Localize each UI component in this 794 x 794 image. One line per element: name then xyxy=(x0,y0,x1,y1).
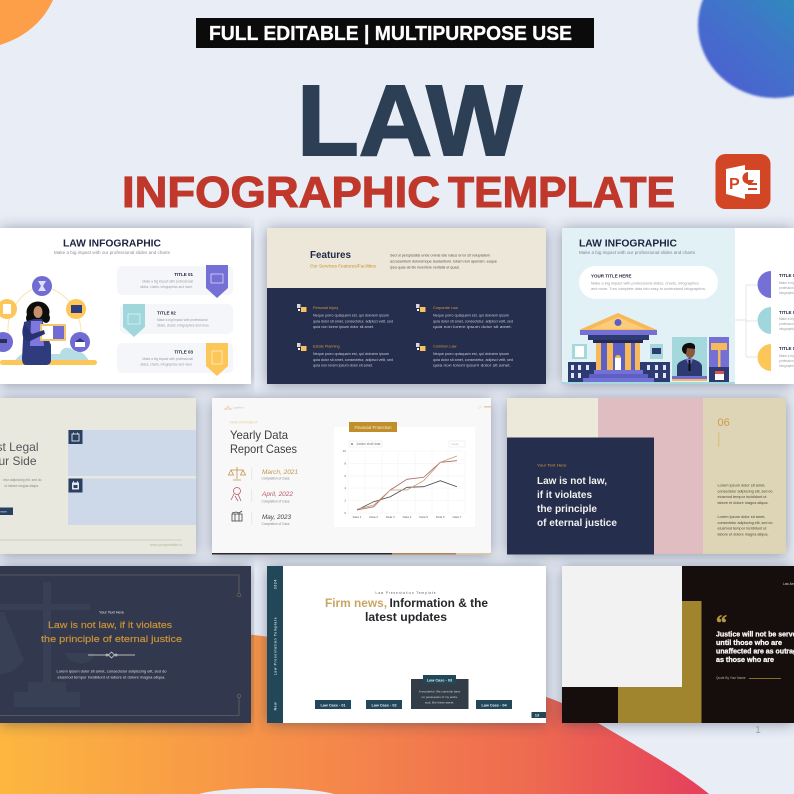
illustration: courthouse xyxy=(568,313,670,382)
callout: your title here: Make a big impact with professional slides, charts, infographics xyxy=(591,282,699,286)
heading: features: Features xyxy=(310,249,351,261)
item: corporate law: quia dolor sit amet, consectetur, adipisci velit, sed xyxy=(433,320,513,324)
title: LAW: LAW xyxy=(297,65,523,177)
text: legal paragraph: etur adipiscing elit, sed do xyxy=(3,478,42,482)
item: May 2023: May, 2023 xyxy=(262,514,291,521)
text: justice quote xyxy=(716,632,794,664)
text: justice quote: as those who are xyxy=(716,657,774,664)
line chart: justice case data: 6 xyxy=(344,474,346,478)
line chart: justice case data: Data 5 xyxy=(419,515,428,519)
number: 06: 06 xyxy=(718,417,730,429)
card: title 02: Make a big impact with professional xyxy=(157,318,208,322)
text: slide 6 paragraph: labore et dolore magna aliqua. xyxy=(718,532,769,536)
panel: slide 2 features xyxy=(267,228,546,384)
line chart: justice case data: 0 xyxy=(344,511,346,515)
icon: purple half circle xyxy=(758,271,771,298)
illustration: lawyer portrait xyxy=(672,337,707,381)
text: your text here: Your Text Here xyxy=(99,610,124,614)
item: common law: quia non lorem ipsum dolor sit amet. xyxy=(433,364,511,368)
icon: quote mark: “ xyxy=(716,610,727,635)
divider and url: www.yourgreatsite.in xyxy=(150,543,182,547)
card: title 02: TITLE 02 xyxy=(157,310,176,316)
item: corporate law xyxy=(416,304,513,329)
image placeholder: white square xyxy=(562,566,682,687)
item: corporate law: Corporate Law xyxy=(433,306,458,310)
frame: gold corner border xyxy=(0,575,241,716)
line chart: justice case data: Data 2 xyxy=(369,515,378,519)
illustration: woman with tablet and icons xyxy=(0,276,97,365)
item: March 2021: March, 2021 xyxy=(262,469,298,476)
card: title 02: slides, charts, infographics and more. xyxy=(157,324,210,328)
text: slide 6 paragraph xyxy=(718,484,773,536)
item: corporate law: Neque porro quisquam est, qui dolorem ipsum xyxy=(433,314,509,318)
text: slide 7 paragraph: eiusmod tempor incididunt ut labore et dolore magna aliqua. xyxy=(58,676,166,680)
card: title 01: TITLE 01 xyxy=(174,272,193,277)
text: slide 6 paragraph: eiusmod tempor incididunt ut xyxy=(718,526,767,530)
text: slide 6 paragraph: eiusmod tempor incididunt ut xyxy=(718,495,767,499)
subtitle: infographic template: INFOGRAPHIC xyxy=(122,168,440,217)
text: gold quote: Law is not law, if it violates xyxy=(48,620,172,631)
card: law case 03: soul, like these sweet. xyxy=(425,700,454,704)
item: common law: quia dolor sit amet, consectetur, adipisci velit, sed xyxy=(433,358,513,362)
text: right titles xyxy=(779,273,794,368)
text: features subheading: Our Services Features/Facilities xyxy=(310,264,377,268)
page number tag: 13 xyxy=(535,712,540,718)
item: April 2022 xyxy=(231,488,293,504)
item: personal injury: Neque porro quisquam est, qui dolorem ipsum xyxy=(313,314,389,318)
text: slide 7 paragraph xyxy=(56,670,167,680)
line chart: justice case data: Data 1 xyxy=(353,515,362,519)
background: bottom gradient wave xyxy=(0,620,709,794)
item: common law: Neque porro quisquam est, qui dolorem ipsum xyxy=(433,352,509,356)
item: April 2022: April, 2022 xyxy=(261,491,293,498)
item: estate planning: quia non lorem ipsum dolor sit amet. xyxy=(313,364,373,368)
card: title 02 xyxy=(120,304,233,337)
tag: law case 01: Law Case - 01 xyxy=(320,703,346,707)
line chart: justice case data: Data 6 xyxy=(436,515,445,519)
line chart: justice case data: Data 3 xyxy=(386,515,395,519)
heading: legal side xyxy=(0,440,38,468)
block: navy quote: if it violates xyxy=(537,489,592,501)
watermark: scales of justice xyxy=(0,582,95,707)
heading: firm news: latest updates xyxy=(365,612,447,624)
tag: financial protection xyxy=(349,422,397,432)
tag: law case 04: Law Case - 04 xyxy=(481,703,507,707)
line chart: justice case data: Data 4 xyxy=(403,515,412,519)
card: law case 03: Law Case - 03 xyxy=(427,678,452,682)
icon: calendar top xyxy=(68,430,82,444)
item: April 2022: Completion of Case xyxy=(262,500,290,504)
line chart: justice case data: 2 xyxy=(344,498,346,502)
card: law case 03 xyxy=(411,675,468,709)
item: estate planning xyxy=(297,343,393,368)
heading: yearly data report cases xyxy=(230,428,297,456)
icon: yellow half circle xyxy=(758,344,771,371)
logo xyxy=(224,406,244,410)
page marker xyxy=(478,406,491,410)
card: law case 03: no possession of my entire xyxy=(422,695,458,699)
accent bar xyxy=(718,432,719,447)
item: personal injury: Personal Injury xyxy=(313,306,338,310)
line chart: justice case data: Yearly xyxy=(451,442,459,446)
icon: PowerPoint logo: P xyxy=(729,176,740,193)
page number: 1 xyxy=(755,725,761,736)
callout: your title here: and more. Turn complete data into easy to understand infographics. xyxy=(591,287,706,291)
sidebar: vertical label xyxy=(267,566,283,723)
text: attribution xyxy=(716,676,781,680)
ornament divider xyxy=(88,652,135,658)
text: features paragraph: Sed ut perspiciatis unde omnis iste natus error sit voluptatem xyxy=(390,254,490,258)
text: features paragraph: ipsa quae ab illo inventore veritatis et quasi. xyxy=(390,266,460,270)
item: May 2023: Completion of Case xyxy=(262,522,290,526)
diagram: connector lines xyxy=(735,285,757,357)
card: title 01: slides, charts, infographics and more. xyxy=(140,285,193,289)
heading: firm news: Firm news, xyxy=(325,598,387,610)
line chart: justice case data: Justice shall data xyxy=(356,442,381,446)
text: features paragraph xyxy=(390,254,497,270)
banner: full editable: FULL EDITABLE | MULTIPURPOSE USE xyxy=(209,23,572,45)
panel: slide 9 justice quote xyxy=(562,566,794,723)
heading: firm news: Information & the xyxy=(390,598,488,610)
text: gold quote xyxy=(41,620,182,645)
callout: your title here: YOUR TITLE HERE xyxy=(591,274,632,278)
item: corporate law: quia non lorem ipsum dolor sit amet. xyxy=(433,325,512,329)
block: navy quote xyxy=(507,438,654,554)
card: title 01: Make a big impact with professional xyxy=(142,280,193,284)
panel: slide 7 dark quote xyxy=(0,566,251,723)
heading: firm news xyxy=(325,598,488,624)
icon: teal half circle xyxy=(758,307,771,334)
line chart: justice case data xyxy=(334,427,475,527)
block: navy quote: of eternal justice xyxy=(537,517,617,529)
item: common law xyxy=(416,343,513,368)
item: March 2021: Completion of Case xyxy=(262,476,290,480)
card: law case 03: A wonderful. We currently have xyxy=(419,690,461,694)
text: attribution: Quote By Your Name xyxy=(716,676,746,680)
text: slide 6 paragraph: consectetur adipiscing elit, sed do xyxy=(718,490,773,494)
text: eyebrow: Law Presentation Template xyxy=(376,591,436,595)
subtitle: infographic template xyxy=(122,168,675,217)
text: slide 6 paragraph: labore et dolore magna aliqua. xyxy=(718,501,769,505)
text: slide 3 subtitle: Make a big impact with our professional slides and charts xyxy=(579,250,696,255)
line chart: justice case data: Data 7 xyxy=(453,515,462,519)
sidebar: vertical label: New xyxy=(274,702,278,710)
card: title 03: TITLE 03 xyxy=(174,350,193,354)
text: justice quote: until those who are xyxy=(716,640,782,647)
block: navy quote: the principle xyxy=(537,503,597,515)
panel: slide 3 courthouse infographic xyxy=(562,228,794,384)
panel: slide 5 yearly data xyxy=(212,398,491,554)
item: common law: Common Law xyxy=(433,344,457,348)
card: title 03: Make a big impact with professional xyxy=(142,357,193,361)
icon: PowerPoint logo xyxy=(716,154,770,209)
line chart: justice case data: 4 xyxy=(344,486,346,490)
text: slide 6 paragraph: consectetur adipiscing elit, sed do xyxy=(718,521,773,525)
button: read more xyxy=(0,508,13,515)
sidebar: vertical label: Law Presentation Template xyxy=(274,617,278,675)
text: legal paragraph xyxy=(3,478,42,488)
line chart: justice case data: 8 xyxy=(344,462,346,466)
block: navy quote: Law is not law, xyxy=(537,475,607,487)
tag: law case 02: Law Case - 02 xyxy=(371,703,397,707)
line chart: justice case data: 10 xyxy=(343,449,346,453)
button: read more: more xyxy=(0,510,7,514)
block: gold rectangle xyxy=(618,601,702,723)
panel: slide 8 firm news xyxy=(267,566,546,723)
text: legal paragraph: ut labore magna aliqua. xyxy=(5,484,39,488)
panel: slide 1 law infographic xyxy=(0,228,251,384)
item: personal injury: quia dolor sit amet, consectetur, adipisci velit, sed xyxy=(313,320,393,324)
text: slide 6 paragraph: Lorem ipsum dolor sit amet, xyxy=(718,484,766,488)
heading: law infographic: LAW INFOGRAPHIC xyxy=(63,238,161,250)
item: May 2023 xyxy=(232,511,291,526)
tag: financial protection: Financial Protection xyxy=(354,425,392,430)
heading: yearly data report cases: Yearly Data xyxy=(230,428,288,442)
text: gold quote: the principle of eternal justice xyxy=(41,634,182,645)
panel: slide 6 law quote xyxy=(507,398,786,554)
sidebar: vertical label: 2024 xyxy=(274,579,278,589)
subtitle: infographic template: TEMPLATE xyxy=(448,168,675,217)
block: navy quote: Your Text Here xyxy=(537,464,566,468)
item: March 2021 xyxy=(228,467,298,480)
tag: law case 01 xyxy=(315,700,351,709)
image placeholder: top xyxy=(68,430,196,476)
text: slide 1 subtitle: Make a big impact with our professional slides and charts xyxy=(54,250,171,255)
background: top-right blue blob xyxy=(698,0,794,98)
text: slide 7 paragraph: Lorem ipsum dolor sit amet, consectetur adipiscing elit, sed do xyxy=(56,670,167,674)
heading: law infographic: LAW INFOGRAPHIC xyxy=(579,238,677,250)
item: estate planning: Estate Planning xyxy=(313,344,340,348)
callout: your title here xyxy=(579,266,718,299)
background: top-left orange blob xyxy=(0,0,53,45)
item: estate planning: quia dolor sit amet, consectetur, adipisci velit, sed xyxy=(313,358,393,362)
item: personal injury xyxy=(297,304,393,329)
image placeholder: bottom xyxy=(68,478,196,525)
icon: calendar bottom xyxy=(68,478,82,492)
page number tag xyxy=(532,712,546,718)
item: personal injury: quia non lorem ipsum dolor sit amet. xyxy=(313,325,374,329)
card: title 03 xyxy=(117,343,233,376)
logo: Lawfirm xyxy=(233,406,244,410)
page marker: 17 xyxy=(478,406,482,410)
card: title 01 xyxy=(117,265,233,298)
text: eyebrow: MAIN STATEMENT xyxy=(230,420,258,424)
text: features paragraph: accusantium doloremque laudantium, totam rem aperiam, eaque xyxy=(390,260,497,264)
tag: law case 04 xyxy=(476,700,512,709)
banner: full editable xyxy=(196,18,594,48)
tag: law case 02 xyxy=(366,700,402,709)
panel: slide 4 legal side xyxy=(0,398,196,554)
item: estate planning: Neque porro quisquam est, qui dolorem ipsum xyxy=(313,352,389,356)
text: slide 6 paragraph: Lorem ipsum dolor sit amet, xyxy=(718,515,766,519)
card: title 03: slides, charts, infographics and more. xyxy=(140,362,193,366)
illustration: gavel panel xyxy=(709,337,729,382)
heading: yearly data report cases: Report Cases xyxy=(230,442,297,456)
